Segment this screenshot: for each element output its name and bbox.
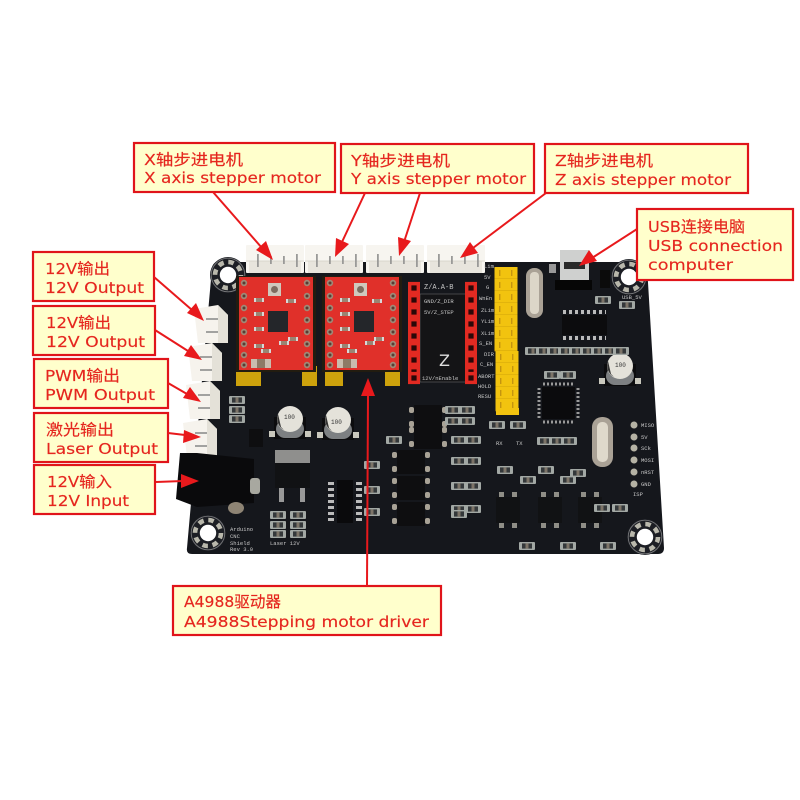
label: Z axis stepper motor	[545, 144, 748, 193]
board silkscreen label	[230, 526, 300, 553]
label: USB connection computer: computer	[648, 256, 734, 274]
arrow: PWM	[168, 383, 201, 402]
label: USB connection computer: USB connection	[648, 237, 783, 255]
label: PWM output: PWM Output	[45, 386, 155, 404]
label: USB connection computer: USB连接电脑	[648, 218, 745, 236]
label: Y axis stepper motor: Y轴步进电机	[350, 152, 451, 170]
arrow: third motor	[398, 193, 420, 256]
arrow: power input	[156, 474, 199, 488]
surface mount parts	[229, 296, 635, 550]
pin labels: 5V	[484, 274, 491, 281]
voltage regulator	[275, 450, 310, 502]
arrow: Y motor	[335, 193, 365, 257]
label: Y axis stepper motor	[341, 144, 534, 193]
pin labels: Lim	[484, 263, 495, 270]
circuit board	[176, 245, 664, 555]
board silkscreen label: Shield	[230, 540, 250, 547]
pin labels: DIR	[484, 351, 495, 358]
electrolytic capacitors: 100	[615, 362, 626, 369]
label: PWM output: PWM输出	[45, 367, 120, 385]
empty Z driver socket	[408, 282, 477, 384]
ISP header: nRST	[641, 469, 655, 476]
label: 12V output 2: 12V Output	[46, 333, 145, 351]
board silkscreen label: Arduino	[230, 526, 253, 533]
pin labels: ZLim	[481, 307, 495, 314]
board body	[187, 262, 664, 554]
board silkscreen label: Laser 12V	[270, 540, 300, 547]
label: Z axis stepper motor: Z轴步进电机	[555, 152, 654, 170]
pin labels: G	[486, 284, 489, 291]
USB connector	[549, 250, 610, 290]
label: Z axis stepper motor: Z axis stepper motor	[555, 171, 732, 189]
arrow: Z motor	[460, 193, 546, 258]
pin labels: C_EN	[480, 361, 493, 368]
empty Z driver socket: Z/A.A-B	[424, 284, 453, 292]
electrolytic capacitors: 100	[331, 419, 342, 426]
ISP header: 5V	[641, 434, 648, 441]
mounting holes	[190, 257, 663, 555]
label: 12V output 1	[33, 252, 154, 301]
pin labels: ABORT	[478, 373, 495, 380]
label: 12V output 1: 12V Output	[45, 279, 144, 297]
arrow: laser	[168, 430, 201, 443]
label: laser output: 激光输出	[46, 421, 114, 439]
pin labels	[478, 263, 495, 400]
optocouplers	[392, 405, 602, 528]
label: laser output	[34, 413, 168, 462]
arrow: USB	[579, 229, 637, 266]
label: X axis stepper motor: X axis stepper motor	[144, 169, 322, 187]
pin labels: RESU	[478, 393, 491, 400]
integrated circuits	[249, 312, 607, 523]
ISP header: TX	[516, 440, 523, 447]
label: USB connection computer	[637, 209, 793, 280]
ISP header: GND	[641, 481, 652, 488]
label: 12V output 2	[33, 306, 155, 355]
arrow: 12V output 1	[154, 277, 204, 321]
ISP header: USB_5V	[622, 294, 643, 301]
label: X axis stepper motor: X轴步进电机	[144, 151, 244, 169]
electrolytic capacitors	[269, 353, 641, 440]
label: A4988 driver: A4988驱动器	[184, 593, 281, 611]
ISP header	[496, 294, 655, 498]
arrow: A4988	[361, 378, 375, 586]
pin labels: S_EN	[479, 340, 492, 347]
DC power jack	[176, 453, 260, 514]
board silkscreen label: Rev 3.0	[230, 546, 253, 553]
top motor connectors	[246, 245, 485, 273]
pin labels: XLim	[481, 330, 495, 337]
yellow pin header	[494, 267, 519, 415]
pin labels: YLim	[481, 318, 495, 325]
stepper driver modules	[236, 276, 402, 386]
ISP header: MISO	[641, 422, 655, 429]
label: PWM output	[34, 359, 168, 408]
label: 12V output 2: 12V输出	[46, 314, 111, 332]
label: A4988 driver	[173, 586, 441, 635]
electrolytic capacitors: 100	[284, 414, 295, 421]
left side connectors	[183, 305, 228, 457]
label: Y axis stepper motor: Y axis stepper motor	[350, 170, 527, 188]
label: 12V input: 12V输入	[47, 473, 112, 491]
board silkscreen label: CNC	[230, 533, 241, 540]
label: 12V input	[34, 465, 155, 514]
empty Z driver socket: 5V/Z_STEP	[424, 309, 454, 316]
label: X axis stepper motor	[134, 143, 335, 192]
empty Z driver socket: 12V/nEnable	[422, 375, 458, 382]
ISP header: RX	[496, 440, 503, 447]
ISP header: ISP	[633, 491, 643, 498]
arrow: 12V output 2	[155, 330, 202, 360]
pin labels: HOLD	[478, 383, 492, 390]
label: 12V input: 12V Input	[47, 492, 129, 510]
empty Z driver socket: GND/Z_DIR	[424, 298, 454, 305]
arrow: X motor	[213, 192, 273, 260]
pin labels: WnEn	[479, 295, 492, 302]
ISP header: MOSI	[641, 457, 654, 464]
label: A4988 driver: A4988Stepping motor driver	[184, 613, 430, 631]
label: 12V output 1: 12V输出	[45, 260, 110, 278]
label: laser output: Laser Output	[46, 440, 158, 458]
crystals	[526, 268, 613, 467]
ISP header: SCk	[641, 445, 652, 452]
empty Z driver socket: Z	[439, 351, 450, 370]
